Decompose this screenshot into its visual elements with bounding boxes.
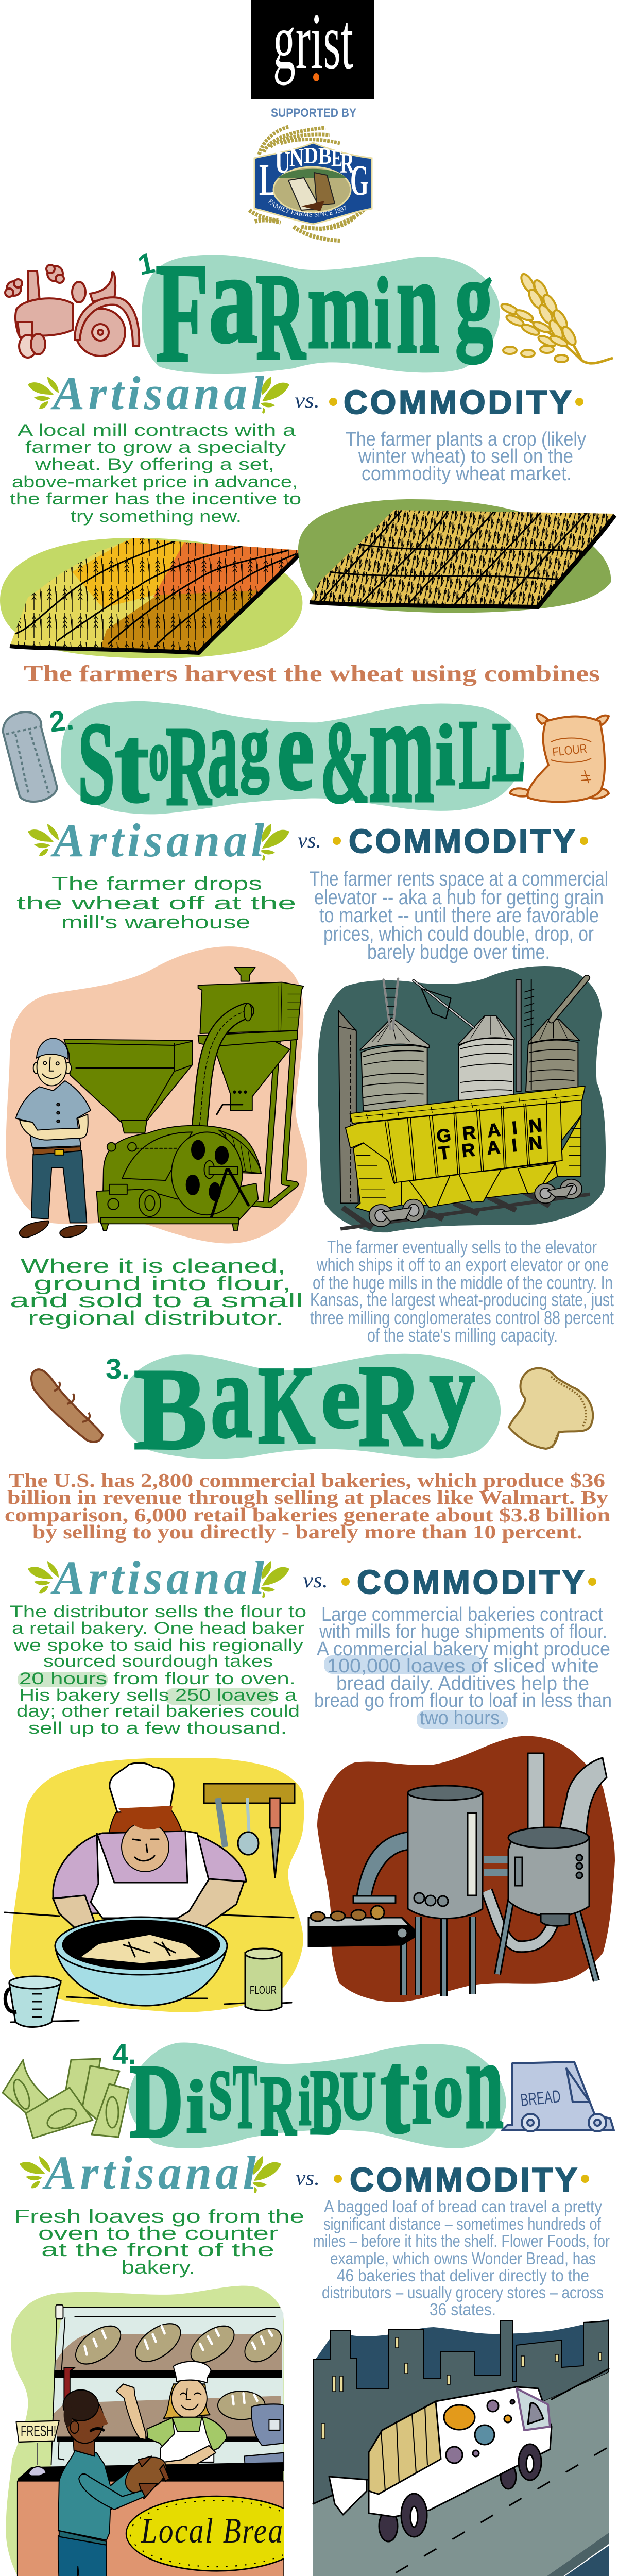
number 4: 4. <box>112 2038 136 2070</box>
bakery statistics paragraph: billion in revenue through selling at places like Walmart. By <box>7 1487 608 1509</box>
heading text: y <box>430 1332 475 1449</box>
cash register <box>245 2404 284 2473</box>
comparison header 3 <box>28 1551 596 1604</box>
Lundberg logo: D <box>304 142 318 168</box>
vs label: vs. <box>295 389 320 413</box>
oval shop sign: Local Brea <box>141 2511 283 2550</box>
heading text: K <box>258 1344 315 1467</box>
harvest caption: The farmers harvest the wheat using combines <box>24 661 600 686</box>
baker shirt <box>53 1831 246 1913</box>
comparison header 1 <box>28 367 583 421</box>
icon: wheat stalks <box>500 272 613 363</box>
flour canister <box>245 1948 282 2010</box>
Lundberg logo: E <box>331 145 342 171</box>
illustration: farmer and mill machine <box>6 946 307 1243</box>
fresh sign: FRESH! <box>21 2422 56 2439</box>
heading text: e <box>321 1349 360 1447</box>
mixing bowl <box>55 1917 227 2006</box>
section 4 heading: Distribution <box>112 2012 506 2160</box>
road <box>313 2372 609 2576</box>
flour canister: FLOUR <box>250 1984 277 1996</box>
road dashes <box>339 2448 607 2576</box>
commodity distribution text: 46 bakeries that deliver directly to the <box>337 2266 589 2285</box>
table lines <box>5 1912 294 2022</box>
low hopper <box>64 1040 192 1122</box>
heading text: o <box>434 2046 463 2133</box>
artisanal mill text: and sold to a small <box>10 1290 303 1312</box>
delivery van <box>329 2387 552 2541</box>
Lundberg logo: G <box>350 156 369 205</box>
icon: bread delivery truck <box>502 2062 614 2131</box>
heading text: i <box>299 2063 311 2139</box>
icon: grain silo <box>3 712 57 802</box>
bread loaves on shelves <box>71 2316 286 2419</box>
woman baker <box>116 2362 227 2477</box>
heading text: D <box>130 2043 183 2160</box>
feed pipe <box>199 1011 246 1130</box>
commodity bakery text: two hours. <box>420 1707 505 1729</box>
heading text: m <box>369 662 435 835</box>
artisanal farming text: above-market price in advance, <box>12 472 298 491</box>
artisanal bakery text: sourced sourdough takes <box>43 1652 273 1670</box>
artisanal label: Artisanal <box>42 2146 256 2199</box>
section 1 heading: Farming <box>135 227 500 392</box>
artisanal leaves right <box>261 1561 289 1598</box>
comparison header 4 <box>20 2146 589 2199</box>
heading text: R <box>260 2058 297 2153</box>
left machine cylinder <box>408 1786 483 1919</box>
counter <box>8 2462 284 2576</box>
heading text: R <box>358 1341 423 1471</box>
heading blob <box>61 701 524 814</box>
commodity bakery text: 100,000 loaves of sliced white <box>327 1655 599 1677</box>
commodity farming text: winter wheat) to sell on the <box>358 446 573 467</box>
illustration: artisanal wheat field <box>0 531 309 659</box>
mill machine <box>64 968 303 1231</box>
artisanal bakery text: The distributor sells the flour to <box>10 1602 306 1621</box>
heading text: o <box>149 717 169 794</box>
heading text: a <box>208 674 238 825</box>
bakery statistics paragraph: The U.S. has 2,800 commercial bakeries, which produce $36 <box>9 1470 605 1492</box>
commodity farming text: commodity wheat market. <box>362 463 572 485</box>
baker apron <box>91 1831 209 1918</box>
artisanal farming text: the farmer has the incentive to <box>10 489 301 508</box>
commodity bakery text: bread daily. Additives help the <box>336 1673 589 1694</box>
icon: bread slice <box>509 1368 593 1449</box>
artisanal distribution text: Fresh loaves go from the <box>14 2206 304 2227</box>
illustration: commodity bakery machine <box>308 1736 615 2002</box>
Lundberg logo: L <box>259 155 277 205</box>
measuring cup <box>5 1976 61 2027</box>
commodity storage text: barely budge over time. <box>367 941 550 963</box>
icon: money bills <box>3 2059 129 2138</box>
heading text: R <box>166 703 212 829</box>
heading text: n <box>465 2012 504 2156</box>
background blob <box>317 1736 615 2002</box>
icon: tractor <box>5 265 139 358</box>
artisanal leaves right <box>261 824 289 861</box>
heading text: i <box>186 2066 206 2148</box>
heading text: m <box>307 243 372 373</box>
artisanal farming text: wheat. By offering a set, <box>35 455 274 473</box>
heading text: n <box>396 227 439 383</box>
heading text: e <box>277 683 314 815</box>
commodity label: COMMODITY <box>344 383 572 421</box>
heading blob <box>120 1354 501 1459</box>
artisanal storage text: The farmer drops <box>52 873 262 894</box>
train car <box>346 1086 585 1212</box>
Lundberg logo <box>248 125 373 243</box>
mill legs <box>248 1036 296 1205</box>
baker face <box>122 1822 169 1872</box>
pipes and legs <box>353 1753 607 1996</box>
heading text: T <box>233 2045 258 2147</box>
heading text: g <box>455 234 493 364</box>
illustration: grain elevators and train <box>318 966 606 1232</box>
illustration: commodity wheat field <box>298 499 618 613</box>
Lundberg logo: FAMILY FARMS SINCE 1937 <box>268 199 346 217</box>
heading text: a <box>209 227 258 370</box>
commodity distribution text: 36 states. <box>430 2300 496 2319</box>
artisanal leaves left <box>28 377 59 409</box>
Lundberg logo: U <box>275 145 290 179</box>
fresh sign <box>16 2421 59 2476</box>
heading text: & <box>320 698 370 827</box>
right machine cylinder <box>508 1827 589 1926</box>
section 3 heading: Bakery <box>106 1328 501 1473</box>
section 2 heading: Storage & Mill <box>47 662 525 835</box>
background blob <box>6 2286 284 2576</box>
train label: TRAIN <box>437 1131 543 1164</box>
heading text: U <box>340 2057 376 2133</box>
heading text: B <box>310 2050 342 2154</box>
heading text: F <box>156 233 209 392</box>
building windows <box>321 2337 602 2439</box>
artisanal storage text: the wheat off at the <box>16 892 296 913</box>
number 3: 3. <box>106 1352 130 1385</box>
artisanal bakery text: a retail bakery. One head baker <box>12 1619 304 1637</box>
commodity label: COMMODITY <box>350 2161 577 2198</box>
artisanal leaves right <box>261 377 289 414</box>
commodity bakery highlights <box>324 1655 508 1729</box>
supported by label: SUPPORTED BY <box>271 106 356 120</box>
artisanal label: Artisanal <box>50 367 264 419</box>
background blob <box>318 966 606 1232</box>
artisanal leaves left <box>28 1561 59 1593</box>
artisanal distribution text: bakery. <box>122 2257 195 2278</box>
heading text: L <box>492 706 525 799</box>
display case <box>52 2305 283 2471</box>
heading blob <box>128 2042 506 2148</box>
bakery statistics paragraph: comparison, 6,000 retail bakeries generate about $3.8 billion <box>5 1504 610 1526</box>
commodity farming text: The farmer plants a crop (likely <box>346 429 586 450</box>
artisanal mill text: ground into flour, <box>33 1273 291 1295</box>
icon: flour sack <box>510 714 609 802</box>
artisanal bakery highlights <box>18 1672 274 1705</box>
heading text: L <box>459 700 492 809</box>
number 1: 1. <box>135 245 165 281</box>
heading text: i <box>436 708 455 803</box>
artisanal bakery text: day; other retail bakeries could <box>16 1702 300 1720</box>
artisanal storage text: mill's warehouse <box>61 911 250 933</box>
heading text: R <box>256 248 306 386</box>
vs label: vs. <box>298 829 321 853</box>
city skyline <box>313 2321 609 2504</box>
wheels <box>369 1179 582 1227</box>
artisanal distribution text: oven to the counter <box>38 2223 278 2244</box>
illustration: wonder bread van on road <box>313 2319 609 2576</box>
farmer figure <box>16 1038 91 1238</box>
vs label: vs. <box>296 2166 320 2190</box>
heading text: t <box>380 2026 410 2158</box>
icon: baguette <box>31 1369 102 1442</box>
artisanal farming text: farmer to grow a specialty <box>25 438 286 456</box>
bakery statistics paragraph: by selling to you directly - barely more than 10 percent. <box>32 1521 582 1543</box>
oval shop sign <box>126 2496 284 2572</box>
artisanal label: Artisanal <box>50 1551 264 1604</box>
train label <box>435 1114 543 1164</box>
illustration: artisanal baker kneading dough <box>5 1758 304 2027</box>
commodity label: COMMODITY <box>349 822 575 860</box>
conveyor belt with loaves <box>308 1904 414 1946</box>
Lundberg logo: R <box>340 147 355 179</box>
Lundberg logo: N <box>289 143 304 172</box>
artisanal bakery text: we spoke to said his regionally <box>13 1636 303 1654</box>
train label: GRAIN <box>435 1114 543 1147</box>
baker arms <box>53 1879 244 1951</box>
heading text: t <box>115 704 149 825</box>
rails <box>342 1191 550 1228</box>
background blob <box>10 1758 304 2012</box>
illustration: local bakery counter <box>6 2286 307 2576</box>
heading text: S <box>78 699 115 828</box>
vs label: vs. <box>303 1569 328 1592</box>
heading blob <box>142 255 500 374</box>
icon: flour sack: FLOUR <box>552 742 588 759</box>
comparison header 2 <box>28 814 588 867</box>
artisanal leaves left <box>28 824 59 856</box>
artisanal distribution text: at the front of the <box>41 2239 274 2260</box>
mill body <box>102 1126 261 1219</box>
heading text: i <box>412 2052 431 2140</box>
baker chef hat <box>110 1763 174 1812</box>
icon: bread delivery truck: BREAD <box>520 2087 561 2110</box>
artisanal bakery text: sell up to a few thousand. <box>28 1719 287 1737</box>
heading text: i <box>374 257 391 369</box>
heading text: B <box>134 1345 207 1473</box>
commodity label: COMMODITY <box>357 1563 585 1601</box>
artisanal mill text: regional distributor. <box>28 1308 284 1329</box>
artisanal farming text: try something new. <box>71 507 242 526</box>
number 2: 2. <box>47 703 76 738</box>
night sky <box>313 2319 609 2388</box>
artisanal leaves right <box>252 2156 281 2193</box>
top hopper <box>234 968 255 981</box>
artisanal bakery text: His bakery sells 250 loaves a <box>19 1686 297 1704</box>
Lundberg logo: B <box>318 143 332 169</box>
utensil rack <box>204 1784 295 1878</box>
baker hair <box>108 1808 184 1872</box>
heading text: a <box>211 1328 252 1463</box>
silos and masts <box>338 978 587 1203</box>
grist logo <box>251 0 374 99</box>
customer with bread <box>58 2390 171 2576</box>
artisanal leaves left <box>20 2156 50 2188</box>
heading text: S <box>209 2057 232 2134</box>
artisanal label: Artisanal <box>50 814 264 867</box>
artisanal mill text: Where it is cleaned, <box>21 1256 286 1277</box>
artisanal bakery text: 20 hours from flour to oven. <box>19 1669 296 1688</box>
commodity mill text: of the state's milling capacity. <box>367 1325 558 1346</box>
background blob <box>6 946 307 1243</box>
heading text: g <box>240 697 269 794</box>
artisanal farming text: A local mill contracts with a <box>18 421 296 439</box>
